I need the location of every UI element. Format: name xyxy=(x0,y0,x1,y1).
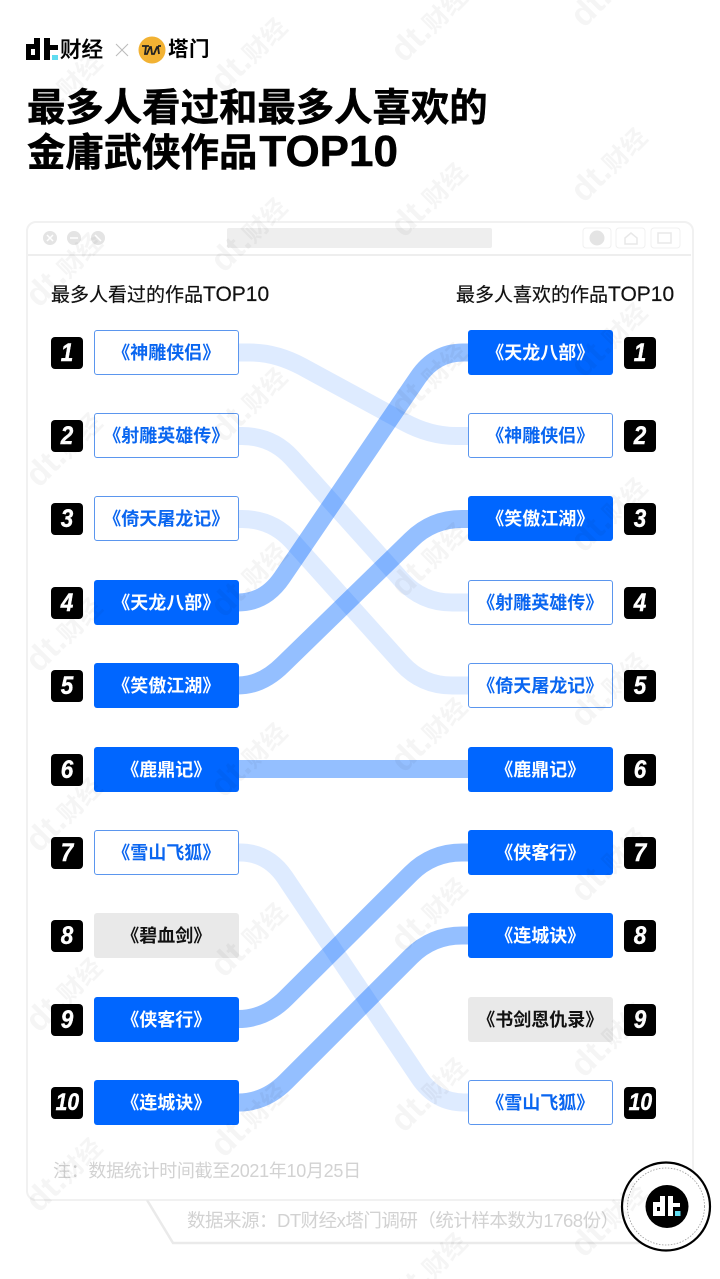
right rank 3: 3 xyxy=(634,505,646,533)
right rank 10: 10 xyxy=(628,1089,652,1116)
right item 9: 《书剑恩仇录》 xyxy=(477,1010,603,1030)
left rank 10 xyxy=(51,1087,83,1119)
watermarks: dt.财经 xyxy=(18,768,109,859)
left rank 8: 8 xyxy=(61,922,73,950)
watermarks: dt.财经 xyxy=(563,293,654,384)
watermarks: dt.财经 xyxy=(383,513,474,604)
left item 10: 《连城诀》 xyxy=(121,1093,211,1113)
left item 3 xyxy=(94,496,238,541)
left rank 1: 1 xyxy=(61,339,73,367)
watermarks: dt.财经 xyxy=(203,713,294,804)
left item 3: 《倚天屠龙记》 xyxy=(103,509,229,529)
right item 1 xyxy=(468,330,612,375)
right rank 7 xyxy=(624,837,656,869)
left rank 4: 4 xyxy=(61,589,73,617)
right rank 8: 8 xyxy=(634,922,646,950)
right rank 2: 2 xyxy=(634,422,646,450)
watermarks: dt.财经 xyxy=(203,188,294,279)
left item 5: 《笑傲江湖》 xyxy=(112,676,220,696)
right rank 5 xyxy=(624,670,656,702)
logo row: 财经 xyxy=(60,38,103,62)
watermarks: dt.财经 xyxy=(18,403,109,494)
right item 8 xyxy=(468,913,612,958)
right rank 1: 1 xyxy=(634,339,646,367)
left rank 1 xyxy=(51,337,83,369)
right item 2 xyxy=(468,413,612,458)
right item 2: 《神雕侠侣》 xyxy=(486,426,594,446)
left item 6 xyxy=(94,747,238,792)
watermarks: dt.财经 xyxy=(18,223,109,314)
watermarks: dt.财经 xyxy=(563,818,654,909)
left item 8 xyxy=(94,913,238,958)
right item 8: 《连城诀》 xyxy=(495,926,585,946)
right item 6 xyxy=(468,747,612,792)
right rank 5: 5 xyxy=(634,672,646,700)
watermarks: dt.财经 xyxy=(383,333,474,424)
right rank 4: 4 xyxy=(634,589,646,617)
connecting lines xyxy=(239,344,468,1112)
watermarks: dt.财经 xyxy=(18,1128,109,1219)
watermarks: dt.财经 xyxy=(203,1073,294,1164)
left rank 5: 5 xyxy=(61,672,73,700)
right item 3 xyxy=(468,496,612,541)
right item 5 xyxy=(468,663,612,708)
right rank 2 xyxy=(624,420,656,452)
right rank 9: 9 xyxy=(634,1006,646,1034)
watermarks: dt.财经 xyxy=(203,358,294,449)
left item 9: 《侠客行》 xyxy=(121,1010,211,1030)
watermarks: dt.财经 xyxy=(18,43,109,134)
right item 3: 《笑傲江湖》 xyxy=(486,509,594,529)
browser toolbar xyxy=(28,223,691,256)
left rank 2: 2 xyxy=(61,422,73,450)
right item 10 xyxy=(468,1080,612,1125)
left rank 10: 10 xyxy=(55,1089,79,1116)
panel: browser window xyxy=(26,221,694,1201)
right rank 8 xyxy=(624,920,656,952)
watermarks: dt.财经 xyxy=(563,468,654,559)
right rank 4 xyxy=(624,587,656,619)
left item 10 xyxy=(94,1080,238,1125)
watermarks: dt.财经 xyxy=(203,533,294,624)
title: 金庸武侠作品TOP10 xyxy=(27,127,398,176)
watermarks: dt.财经 xyxy=(383,153,474,244)
left rank 2 xyxy=(51,420,83,452)
logo row: 塔门 xyxy=(168,38,210,61)
right rank 7: 7 xyxy=(634,839,646,867)
title xyxy=(27,87,488,176)
watermarks: dt.财经 xyxy=(383,688,474,779)
right item 1: 《天龙八部》 xyxy=(486,343,594,363)
left item 2: 《射雕英雄传》 xyxy=(103,426,229,446)
left item 2 xyxy=(94,413,238,458)
watermarks: dt.财经 xyxy=(203,8,294,99)
right item 4: 《射雕英雄传》 xyxy=(477,593,603,613)
logo row xyxy=(26,36,210,64)
right rank 3 xyxy=(624,503,656,535)
right rank 6 xyxy=(624,754,656,786)
watermarks: dt.财经 xyxy=(563,118,654,209)
left item 4 xyxy=(94,580,238,625)
right item 10: 《雪山飞狐》 xyxy=(486,1093,594,1113)
left item 6: 《鹿鼎记》 xyxy=(121,760,211,780)
title: 最多人看过和最多人喜欢的 xyxy=(27,87,488,130)
left rank 9 xyxy=(51,1004,83,1036)
watermarks: dt.财经 xyxy=(383,1048,474,1139)
watermarks: dt.财经 xyxy=(203,893,294,984)
source text: 数据来源：DT财经x塔门调研（统计样本数为1768份） xyxy=(187,1210,619,1231)
left rank 5 xyxy=(51,670,83,702)
left rank 6: 6 xyxy=(61,756,73,784)
badge: dt logo seal xyxy=(620,1161,712,1252)
right item 7 xyxy=(468,830,612,875)
left rank 3: 3 xyxy=(61,505,73,533)
watermarks: dt.财经 xyxy=(563,643,654,734)
right rank 1 xyxy=(624,337,656,369)
left rank 8 xyxy=(51,920,83,952)
left item 4: 《天龙八部》 xyxy=(112,593,220,613)
right item 4 xyxy=(468,580,612,625)
right item 7: 《侠客行》 xyxy=(495,843,585,863)
left rank 7: 7 xyxy=(61,839,73,867)
left item 5 xyxy=(94,663,238,708)
left item 9 xyxy=(94,997,238,1042)
right rank 10 xyxy=(624,1087,656,1119)
source tab xyxy=(146,1201,641,1244)
left item 8: 《碧血剑》 xyxy=(121,926,211,946)
watermarks: dt.财经 xyxy=(383,868,474,959)
left rank 6 xyxy=(51,754,83,786)
watermarks: dt.财经 xyxy=(563,993,654,1084)
right item 6: 《鹿鼎记》 xyxy=(495,760,585,780)
watermarks: dt.财经 xyxy=(18,948,109,1039)
left heading: 最多人看过的作品TOP10 xyxy=(51,283,269,306)
right rank 9 xyxy=(624,1004,656,1036)
left rank 9: 9 xyxy=(61,1006,73,1034)
left item 1 xyxy=(94,330,238,375)
watermarks: dt.财经 xyxy=(18,588,109,679)
right rank 6: 6 xyxy=(634,756,646,784)
left item 1: 《神雕侠侣》 xyxy=(112,343,220,363)
watermarks: dt.财经 xyxy=(563,1173,654,1264)
note: 注：数据统计时间截至2021年10月25日 xyxy=(53,1161,361,1181)
right item 5: 《倚天屠龙记》 xyxy=(477,676,603,696)
left item 7: 《雪山飞狐》 xyxy=(112,843,220,863)
right heading: 最多人喜欢的作品TOP10 xyxy=(456,283,674,306)
left rank 4 xyxy=(51,587,83,619)
right item 9 xyxy=(468,997,612,1042)
left rank 3 xyxy=(51,503,83,535)
left rank 7 xyxy=(51,837,83,869)
left item 7 xyxy=(94,830,238,875)
